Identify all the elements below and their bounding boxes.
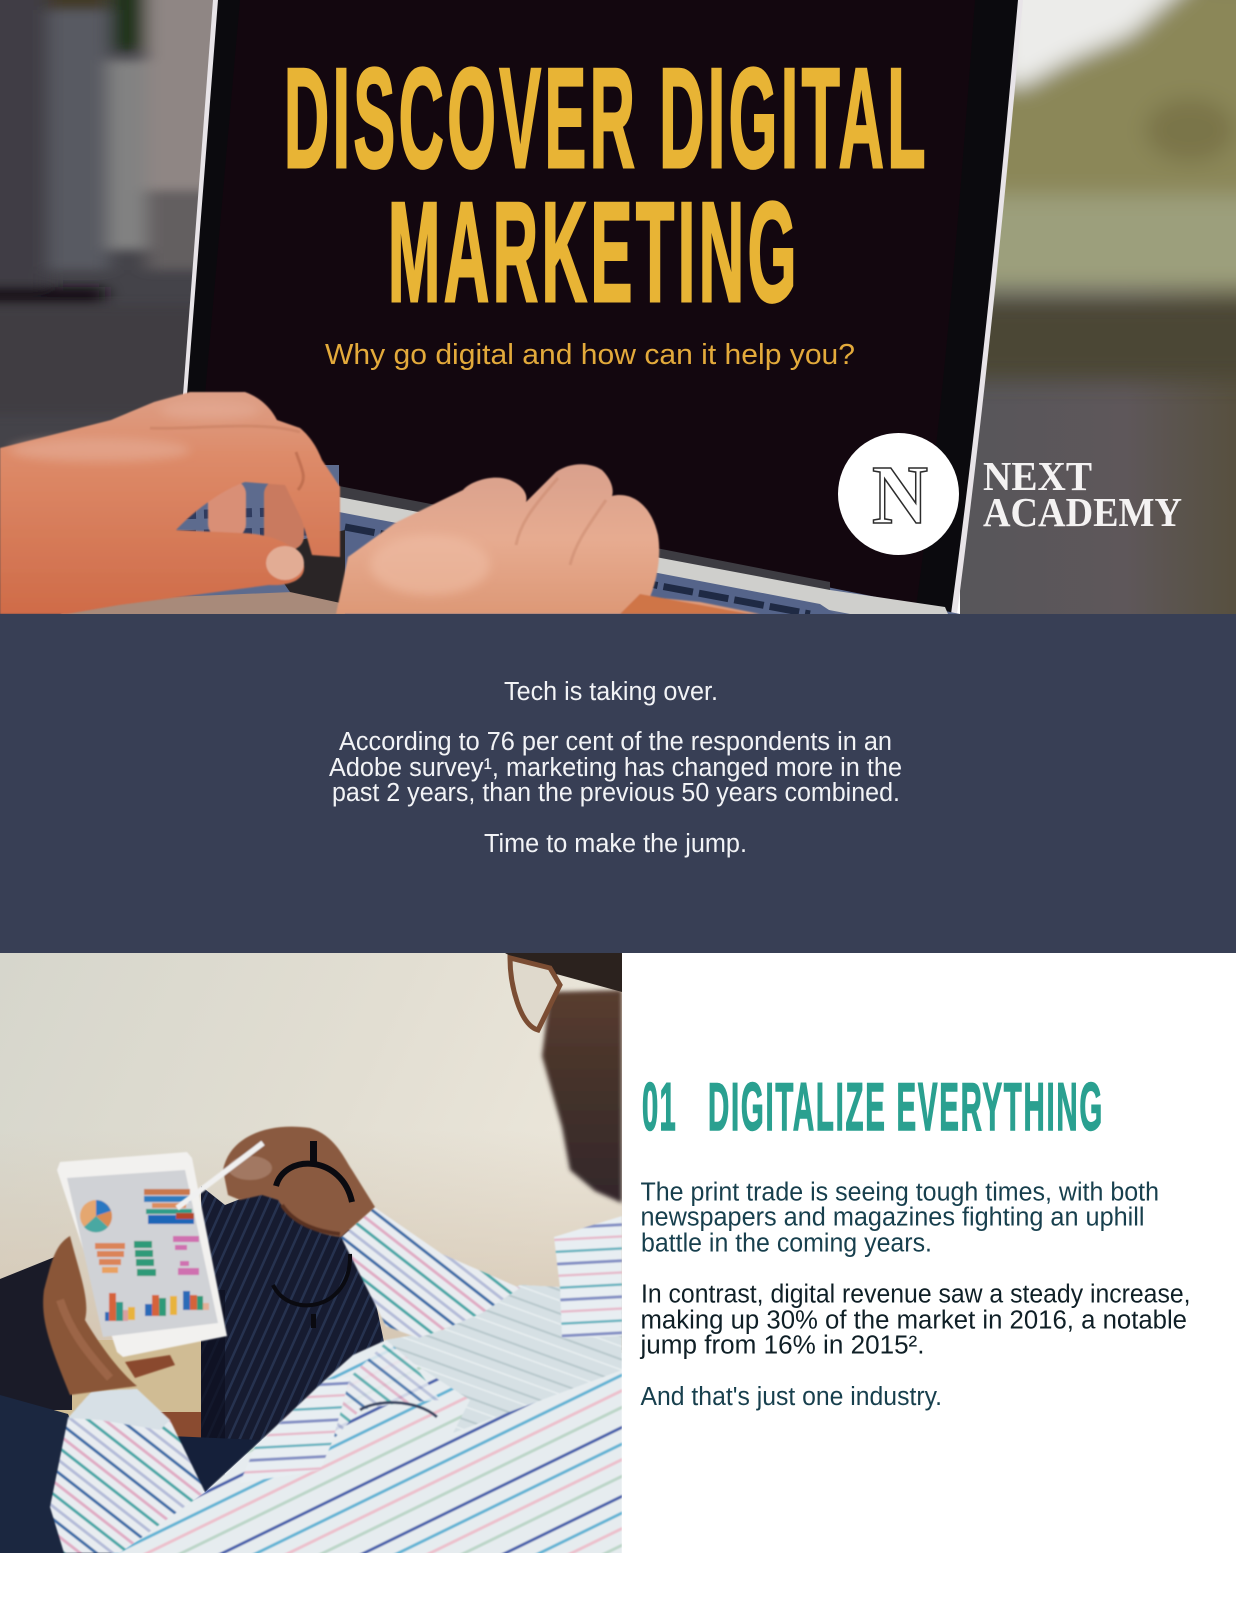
section body text	[639, 1178, 1190, 1411]
left hand holding tablet	[43, 1236, 175, 1395]
left hand	[0, 392, 340, 614]
blurred room background, right	[960, 0, 1236, 614]
subtitle: Why go digital and how can it help you?	[325, 339, 855, 371]
dark trousers	[0, 1186, 384, 1553]
intro text: According to 76 per cent of the respondents in an	[339, 728, 892, 756]
laptop lid and screen	[178, 0, 1023, 614]
section heading: 01 Digitalize Everything: 01	[642, 1069, 677, 1145]
intro text: Time to make the jump.	[484, 830, 747, 858]
blurred room background, left	[0, 0, 213, 614]
shirt: collar	[554, 1216, 622, 1338]
collar fold	[333, 1342, 440, 1440]
tablet pie chart	[80, 1200, 112, 1232]
tablet bar charts	[95, 1189, 209, 1321]
laptop keyboard deck	[60, 465, 960, 614]
logo wordmark: ACADEMY	[983, 489, 1182, 535]
sofa and floor	[54, 1340, 201, 1438]
shirt: body	[100, 1285, 622, 1560]
section heading: 01 Digitalize Everything	[642, 1069, 1104, 1145]
wall	[0, 953, 622, 1353]
intro text: Tech is taking over.	[504, 678, 718, 706]
section body text: In contrast, digital revenue saw a steady increase,	[641, 1281, 1190, 1309]
shirt: right sleeve	[341, 1207, 520, 1338]
photo: man with tablet	[0, 953, 622, 1560]
logo wordmark: NEXT	[983, 453, 1092, 499]
flank panel	[240, 1377, 350, 1483]
right hand with stylus	[177, 1127, 375, 1237]
intro text: Adobe survey¹, marketing has changed more in the	[329, 754, 902, 782]
shoulder panel	[386, 1285, 622, 1433]
logo circle with N	[838, 433, 959, 555]
hero photo: laptop and typing hands	[0, 0, 1236, 614]
section body text: newspapers and magazines fighting an uphill	[640, 1204, 1144, 1232]
right hand	[336, 464, 760, 614]
intro text	[329, 678, 902, 858]
section body text: jump from 16% in 2015².	[639, 1332, 924, 1360]
section body text: making up 30% of the market in 2016, a notable	[640, 1306, 1187, 1334]
shirt: left sleeve	[50, 1389, 205, 1553]
logo: Next Academy	[838, 433, 1182, 555]
section body text: battle in the coming years.	[641, 1229, 932, 1257]
intro text: past 2 years, than the previous 50 years combined.	[332, 779, 900, 807]
tablet	[57, 1152, 227, 1357]
black ornament arcs	[273, 1141, 352, 1328]
section body text: And that's just one industry.	[640, 1383, 942, 1411]
logo circle with N: N	[872, 449, 928, 542]
back fingers	[208, 480, 246, 538]
head with beard and glasses	[505, 953, 622, 1203]
panel: intro band	[0, 614, 1236, 953]
logo wordmark	[983, 453, 1182, 535]
section body text: The print trade is seeing tough times, with both	[640, 1178, 1159, 1206]
